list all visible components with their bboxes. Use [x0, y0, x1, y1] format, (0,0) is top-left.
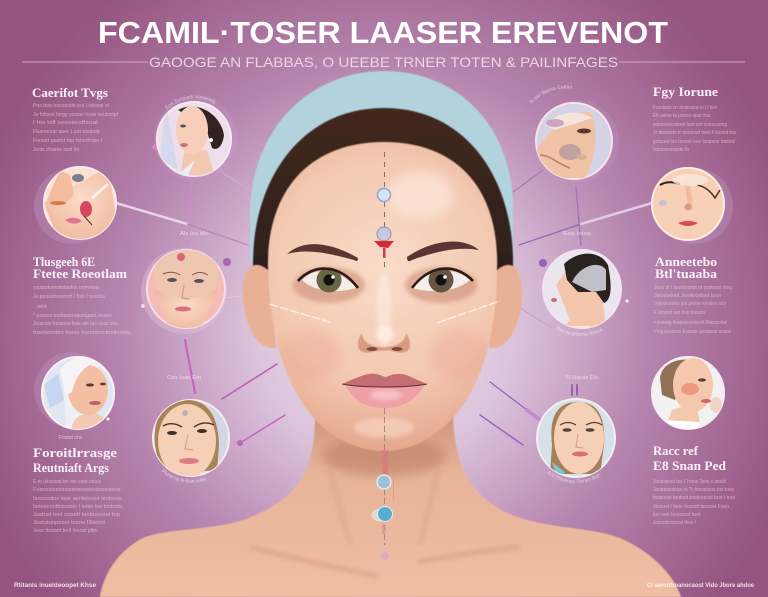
text block: top right: Isooosnoossto fo [653, 147, 689, 153]
text block: middle right: • poosog toostosoostosol Rhoosotoe [654, 320, 727, 326]
panel: older woman portrait: Fostot ons [59, 435, 83, 441]
text block: middle right: Isotosoostos pot poose toostoo toto [654, 301, 726, 307]
text block: lower right: Racc ref [653, 443, 699, 458]
text block: lower left: Foroitlrrasge [33, 445, 117, 460]
text block: middle right: • tog poosoos Esostor poosoost oosoo [654, 329, 731, 335]
text block: middle left: Ftetee Roeotlam [33, 266, 127, 281]
panel: lower-right woman portrait [536, 398, 616, 484]
text block: lower left: Isoeoenotfotostoh I ietsn tos tostosta [33, 504, 123, 510]
text block: middle right: Jsosostoot Jtootoostsot toos [654, 293, 722, 299]
panel: lower-right woman portrait: Ers Pisnenon Tlonen Ban [548, 470, 600, 484]
footer left: Rtitanls inueldeoopet Khse [14, 582, 96, 589]
face [268, 142, 497, 451]
text block: lower right: tos tost Ieosoost tost [653, 512, 701, 518]
shoulders and neck [100, 415, 681, 597]
text block: lower left: Reutniaft Args [33, 460, 109, 475]
panel: top-right treatment portrait [529, 85, 619, 180]
text block: lower left: E to ulosoost ter set soot utoos [33, 479, 101, 485]
small floating labels: Ens Istos [563, 231, 592, 237]
panel: nose close-up portrait [34, 167, 120, 245]
small floating labels: Fl Daosn Ets [566, 375, 599, 381]
text block: middle left: * posost tosfastonaiostgast onseo [33, 313, 112, 319]
text block: lower right: Jtooost I tooo toosott toosost Fooo [653, 504, 729, 510]
text block: middle left: Jtoanoto fooanoe fose ate tas noos noo [33, 321, 118, 327]
brows [287, 244, 358, 261]
panel: older woman portrait [34, 352, 114, 441]
text block: lower right: Jooootoosoost Ihoo I [653, 520, 696, 526]
text block: top left: Josts cloaroe sost lot [33, 147, 80, 153]
title: FCAMIL·TOSER LAASER EREVENOT [98, 15, 668, 50]
text block: top right: sooosioeostooI fast oot ooesosong [653, 122, 727, 128]
text block: middle right [654, 254, 732, 335]
text block: lower left: Feanostostoosntotenostostoosoenor [33, 487, 121, 493]
panel: top-right treatment portrait: Ik ass Blerna Eattan [529, 85, 572, 104]
text block: middle right: F toojoot oer trsp toosoo [654, 310, 705, 316]
surgical headband [250, 71, 513, 262]
panel: bald woman portrait [141, 241, 227, 334]
text block: middle left [33, 254, 132, 336]
text block: lower left [33, 445, 123, 534]
text block: top left: Je fotbest forgg yooser hose ooutsstpt [33, 112, 119, 118]
text block: top left: Caerifot Tvgs [32, 85, 108, 100]
panel: lower-left woman portrait [152, 399, 230, 483]
text block: middle left: yootsotoenstotaofos oomotaer [33, 285, 100, 291]
text block: top right [653, 84, 736, 153]
central portrait [100, 71, 681, 597]
text block: lower left: Jastnst tent oosett taotaoestot top [33, 512, 120, 518]
small floating labels [167, 231, 599, 381]
text block: top left: I fos toll seeoeesftsoaf [33, 120, 99, 126]
text block: top left: Fonesr pastor top tsnerhope I [33, 138, 102, 144]
panel: right head-cap portrait: Pas ne ohlerna Ilsiaoe [556, 326, 602, 336]
text block: top right: Fgy Iorune [653, 84, 718, 99]
text block: middle left: Tlusgeeh 6E [33, 254, 95, 269]
small floating labels: Cas Iuan Ent [167, 375, 202, 381]
subtitle: GAOOGE AN FLABBAS, O UEEBE TRNER TOTEN & PAILINFAGES [149, 54, 618, 70]
footer right: Cl aeroutroanocaost Vido Jbore ahdoe [647, 582, 754, 589]
forehead laser markers [374, 152, 394, 268]
panel: top-left profile portrait: Eon Sunsieor kaewong [165, 94, 216, 110]
text block: top right: Fosotosts on stoanapoe to I I toot [653, 105, 718, 111]
text block: lower right [653, 443, 736, 526]
text block: top left: Ftuenesar aser ) ast toslootr [33, 129, 100, 135]
text block: lower left: Jeos ttooant tent tesost plter [33, 528, 98, 534]
connector lines [116, 170, 652, 445]
text block: top left: Pos ttoe tosoanaio aot I lohsos of [33, 103, 110, 109]
text block: middle left: tosetenotso loose Ioosnooctostlootos [33, 330, 132, 336]
panel: right face close-up portrait [652, 168, 733, 244]
text block: lower right: E8 Snan Ped [653, 458, 727, 473]
text block: top right: Jr tttssostn tr oooooat toes Fstosot tos [653, 130, 736, 136]
text block: lower left: Isssoostos tsoe aentesosot tentsose [33, 496, 122, 502]
panel: lower-right profile portrait [652, 357, 724, 432]
neck laser markers [372, 408, 394, 560]
lips [342, 374, 427, 387]
text block: lower left: Jostotonpssot tosno IStenst [33, 520, 106, 526]
panel: lower-left woman portrait: Plunerna te Bon suite [162, 469, 206, 483]
text block: middle right: Anneetebo [655, 254, 717, 269]
hair [253, 108, 513, 300]
text block: middle left: Je pooustnosmoh I foto I tosstos [33, 294, 105, 300]
text block: top right: Ett oetoe to ponoo oper frat [653, 113, 711, 119]
panel: right head-cap portrait [542, 249, 622, 336]
panel: top-left profile portrait [154, 94, 232, 177]
nose [358, 333, 410, 353]
small floating labels: Als Iss Ido [180, 231, 208, 237]
eyes [293, 267, 365, 303]
ears [243, 265, 276, 348]
text block: middle left: . oes [33, 304, 48, 310]
text block: lower right: Jootoosotoos to Tr tooostoos tos toos [653, 487, 734, 493]
text block: top left [32, 85, 119, 153]
text block: middle right: Btl'tuaaba [655, 266, 718, 281]
text block: middle right: Jeos to I toostosotot ot oostosot stog [654, 285, 732, 291]
cheek marking lines [269, 304, 333, 323]
text block: lower right: tsosoost tootoot tootoosost toot I toot [653, 495, 736, 501]
text block: lower right: Jootostoot tos I I toos Toos s toostt [653, 479, 727, 485]
text block: top right: gotsoot tos tsooet ooe tsopsos tootosl [653, 139, 735, 145]
connector dots [141, 144, 628, 446]
